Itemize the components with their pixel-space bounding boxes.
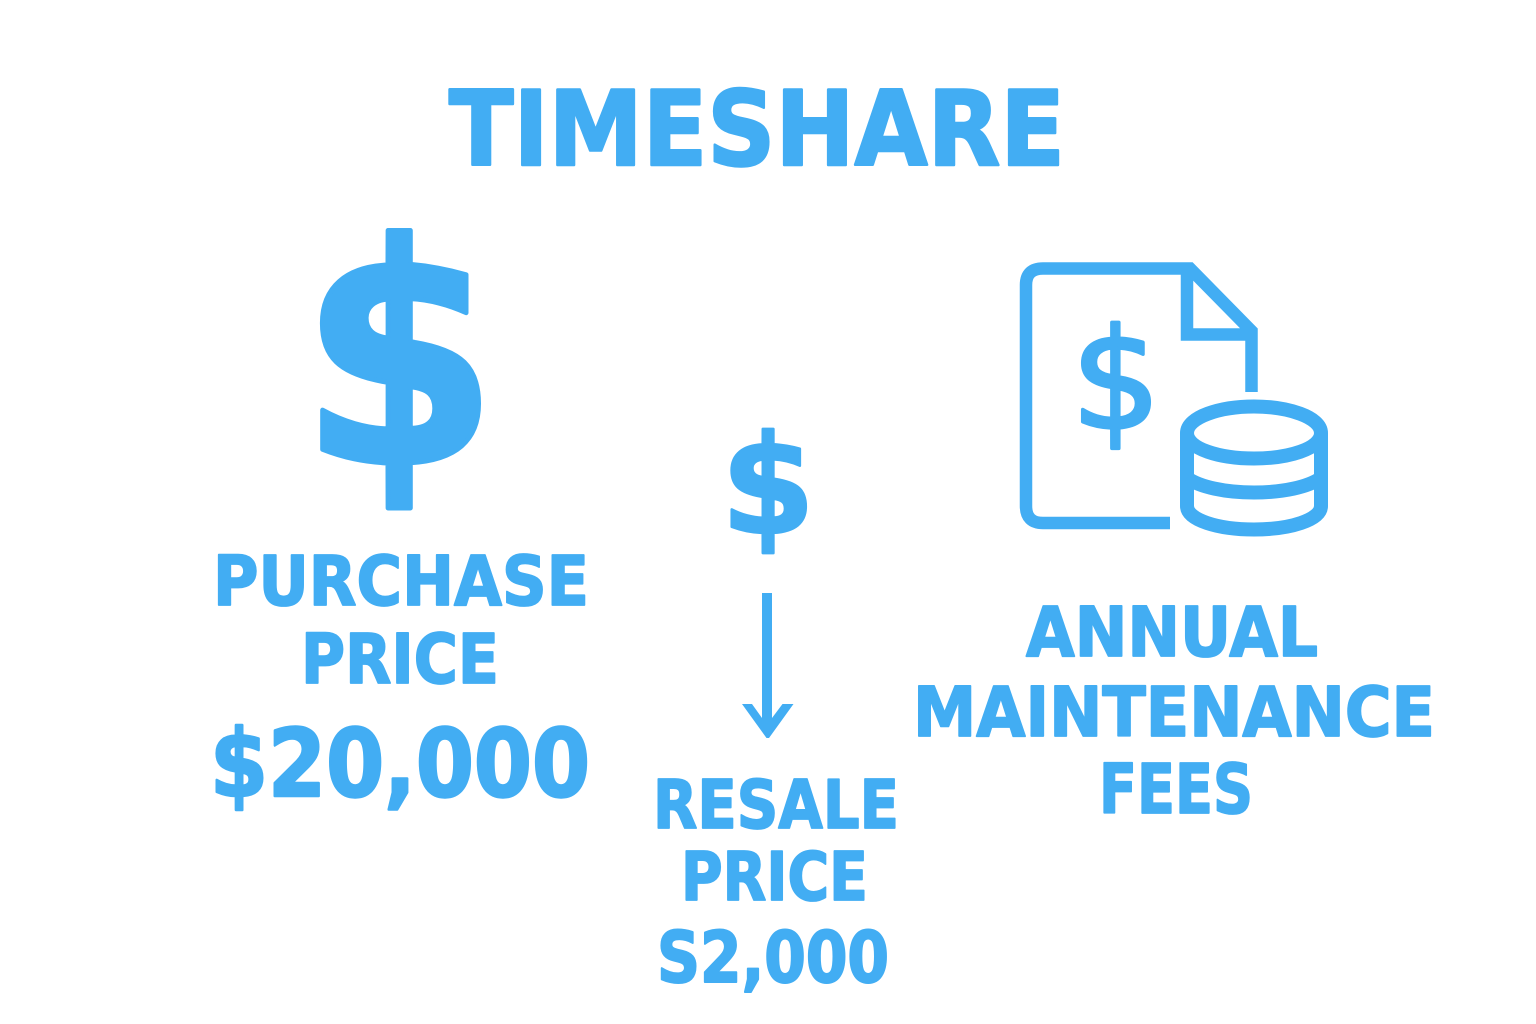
title: TIMESHARE bbox=[449, 70, 1065, 190]
heading: annual maintenance fees: ANNUAL bbox=[1026, 593, 1318, 673]
heading: purchase price: PRICE bbox=[301, 620, 499, 700]
heading: resale price: PRICE bbox=[681, 838, 868, 916]
panel: purchase price bbox=[210, 180, 590, 819]
value: purchase price: $20,000 bbox=[210, 710, 590, 819]
heading: annual maintenance fees: MAINTENANCE bbox=[913, 673, 1435, 753]
heading: resale price: RESALE bbox=[653, 766, 899, 844]
icon: small dollar sign: $ bbox=[721, 407, 815, 566]
heading: annual maintenance fees: FEES bbox=[1099, 750, 1253, 830]
document outline bbox=[1026, 268, 1252, 523]
heading: purchase price bbox=[213, 542, 589, 700]
heading: annual maintenance fees bbox=[913, 593, 1435, 830]
panel: resale price bbox=[653, 407, 899, 999]
icon: fee document with coins bbox=[1026, 268, 1321, 530]
value: resale price: S2,000 bbox=[657, 917, 889, 999]
heading: purchase price: PURCHASE bbox=[213, 542, 589, 622]
panel: annual maintenance fees bbox=[913, 268, 1435, 830]
coin stack bbox=[1187, 406, 1321, 530]
arrow: price drop bbox=[742, 593, 794, 738]
document dollar sign: $ bbox=[1071, 299, 1161, 461]
icon: large dollar sign: $ bbox=[300, 180, 498, 536]
heading: resale price bbox=[653, 766, 899, 916]
